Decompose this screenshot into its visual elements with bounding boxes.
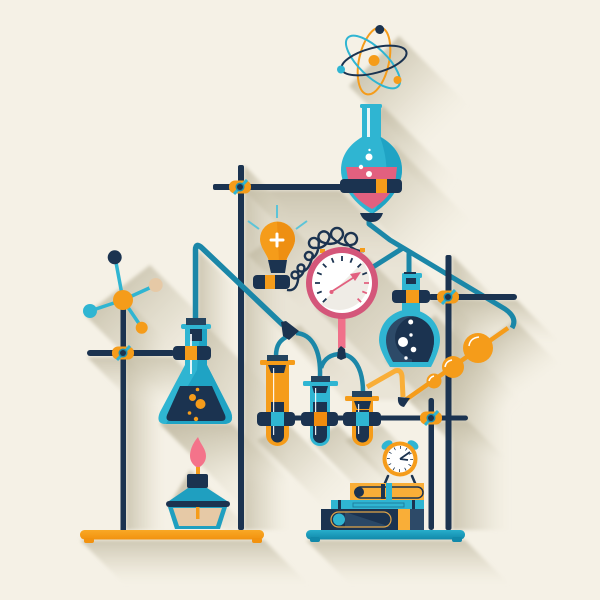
orange bent tube [367, 371, 403, 397]
gauge stem joint [337, 346, 346, 360]
right horizontal rod [428, 294, 517, 300]
test tube 2 [301, 376, 338, 446]
light bulb [248, 205, 307, 289]
clamp: left [112, 346, 134, 360]
test tube 1 [257, 355, 295, 446]
right round flask [379, 272, 440, 367]
connecting tubes between test tubes [276, 333, 363, 392]
tube from top flask through to the bulb chain [369, 218, 514, 328]
left delivery tube [196, 245, 283, 325]
clamp: lower [420, 411, 442, 425]
lower horizontal rod [290, 416, 468, 420]
coil wire [287, 228, 364, 290]
test tube 3 [343, 391, 381, 446]
branch tube from gauge to main tube [373, 248, 409, 274]
right shelf [306, 530, 465, 542]
right stand rod [446, 255, 452, 530]
long shadows [80, 36, 560, 585]
top round-bottom flask [340, 104, 402, 222]
left horizontal rod [87, 350, 175, 356]
clamp: right [437, 290, 459, 304]
gauge [306, 247, 378, 348]
left stand rod [120, 300, 126, 530]
tube joint [281, 321, 299, 340]
books [321, 483, 424, 530]
centre stand rod [238, 165, 244, 530]
alarm clock [380, 438, 420, 483]
burner [166, 437, 230, 529]
orange bulb chain [404, 328, 508, 401]
gauge ears [320, 248, 365, 253]
short stand rod [428, 398, 434, 530]
molecule [83, 250, 163, 334]
left shelf [80, 530, 264, 543]
nozzle [398, 397, 410, 407]
top horizontal rod [213, 184, 343, 190]
left conical flask [158, 318, 232, 424]
clamp: top [229, 180, 251, 194]
icon: atom [337, 25, 410, 97]
